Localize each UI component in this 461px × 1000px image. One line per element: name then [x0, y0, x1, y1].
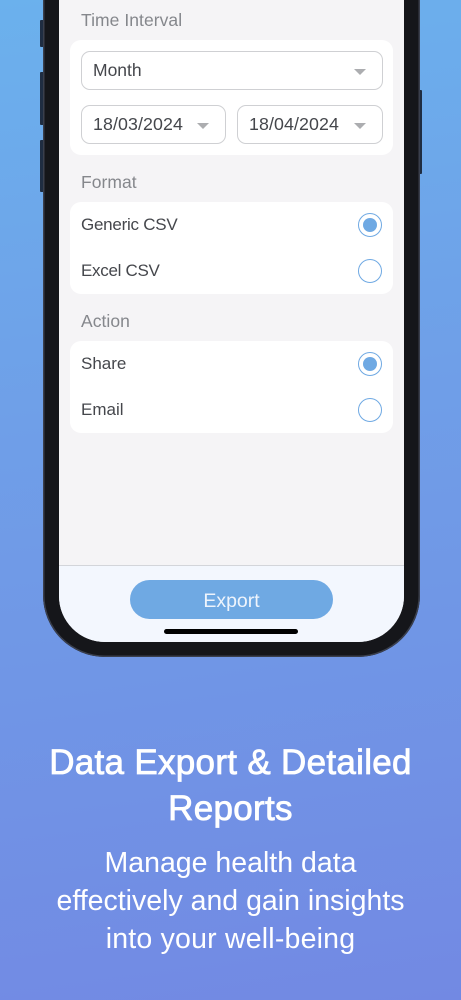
heading: action: Action [81, 311, 130, 331]
icon: dropdown arrow [354, 69, 366, 75]
export button [130, 580, 333, 619]
heading: format: Format [81, 172, 137, 192]
text: end date: 18/04/2024 [249, 114, 339, 134]
panel: format [70, 202, 393, 294]
text: excel csv: Excel CSV [81, 261, 160, 280]
text: email: Email [81, 400, 124, 419]
icon: dropdown arrow [197, 123, 209, 129]
month dropdown [81, 51, 383, 90]
heading: time interval: Time Interval [81, 10, 182, 30]
text: share: Share [81, 354, 126, 373]
text: start date: 18/03/2024 [93, 114, 183, 134]
title: Reports [168, 789, 293, 828]
app footer bar [58, 565, 404, 642]
subtitle: effectively and gain insights [56, 885, 405, 917]
radio: email [358, 398, 382, 422]
start date dropdown [81, 105, 226, 144]
panel: time interval [70, 40, 393, 155]
text: generic csv: Generic CSV [81, 215, 177, 234]
panel: action [70, 341, 393, 433]
export button: Export [203, 590, 260, 612]
title: Data Export & Detailed [49, 743, 412, 782]
radio: excel csv [358, 259, 382, 283]
title [49, 743, 412, 828]
subtitle: into your well-being [106, 923, 355, 955]
subtitle: Manage health data [105, 847, 356, 879]
subtitle [56, 847, 405, 955]
radio: share selected [358, 352, 382, 376]
phone screen [58, 0, 404, 642]
phone frame [43, 0, 420, 657]
icon: dropdown arrow [354, 123, 366, 129]
end date dropdown [237, 105, 383, 144]
icon: phone side buttons left [40, 20, 43, 192]
home indicator [164, 629, 298, 634]
icon: phone side button right [419, 90, 422, 174]
text: month: Month [93, 60, 142, 80]
radio: generic csv selected [358, 213, 382, 237]
